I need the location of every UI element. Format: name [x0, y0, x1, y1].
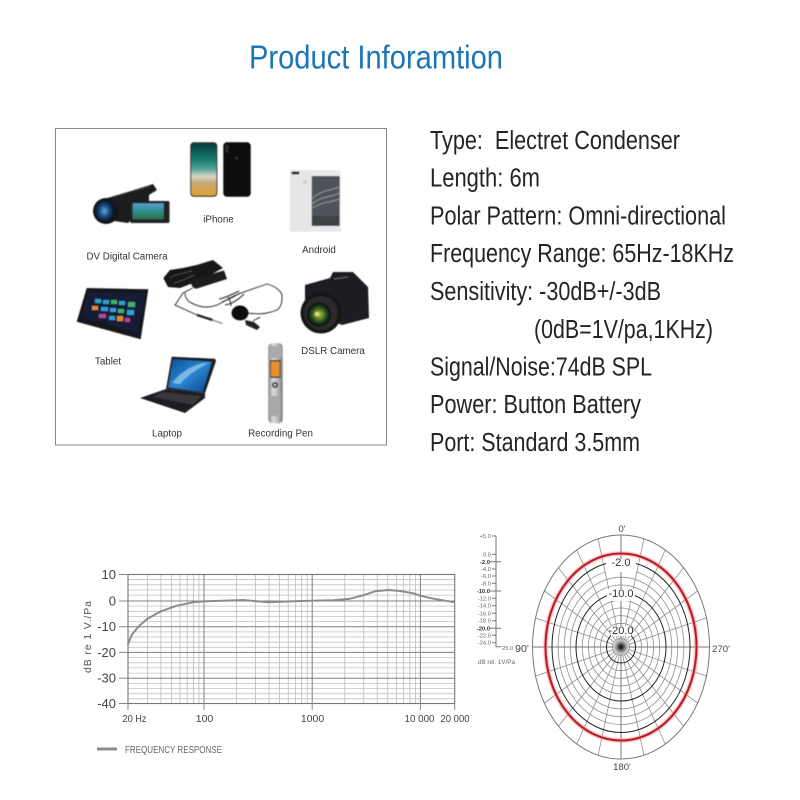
label: Recording Pen: Recording Pen: [248, 428, 313, 440]
text block: specifications: Port: Standard 3.5mm: [430, 429, 640, 457]
angle labels: 270': [712, 644, 730, 655]
label: DSLR Camera: DSLR Camera: [301, 346, 365, 357]
scale: -4.0: [481, 567, 491, 573]
icon: Android phone: [290, 170, 341, 232]
scale: +5.0: [480, 534, 491, 540]
rings: [558, 570, 684, 724]
icon: iPhone pair: [190, 142, 251, 197]
ring labels: -10.0: [608, 588, 634, 600]
ring labels: -2.0: [612, 557, 630, 569]
scale: -24.0: [478, 641, 491, 647]
response curve: [128, 590, 455, 645]
x axis labels: 1000: [301, 713, 324, 725]
icon: DV camcorder: [93, 184, 170, 224]
text block: specifications: Type: Electret Condenser: [430, 127, 680, 155]
ring labels: [606, 557, 636, 637]
legend: [97, 745, 222, 756]
scale: -10.0: [477, 589, 490, 595]
angle labels: 0': [618, 524, 626, 535]
scale: -16.0: [478, 611, 491, 617]
icon: lavalier microphone: [163, 260, 282, 330]
label: Android: Android: [302, 245, 336, 256]
scale: dB rel. 1V/Pa: [478, 659, 515, 666]
chart: frequency response: [82, 567, 470, 756]
x axis labels: 100: [196, 713, 213, 725]
text block: specifications: Polar Pattern: Omni-directional: [430, 202, 726, 230]
scale: [477, 534, 515, 666]
y axis labels: 10: [102, 567, 116, 582]
angle labels: [515, 524, 730, 773]
x axis labels: 10 000: [404, 713, 435, 725]
scale: 25.0: [502, 646, 513, 652]
hub: [613, 639, 629, 655]
spokes: [536, 539, 706, 755]
angle labels: 90': [515, 643, 529, 655]
scale: -20.0: [477, 626, 490, 632]
icon: tablet: [77, 288, 148, 339]
scale: -22.0: [478, 633, 491, 639]
label: Laptop: Laptop: [152, 428, 183, 440]
y axis labels: -20: [97, 645, 116, 660]
scale: -8.0: [481, 581, 491, 587]
label: iPhone: iPhone: [203, 214, 234, 226]
text block: specifications: (0dB=1V/pa,1KHz): [534, 316, 713, 344]
scale: -2.0: [480, 560, 490, 566]
polar plot: [532, 535, 710, 759]
grid: [128, 580, 455, 699]
black level rings: [552, 562, 690, 732]
text block: specifications: Signal/Noise:74dB SPL: [430, 354, 652, 382]
scale: -6.0: [481, 574, 491, 580]
y axis labels: -10: [97, 619, 116, 634]
text block: specifications: Length: 6m: [430, 165, 540, 193]
panel: compatible devices: [56, 128, 386, 445]
y axis labels: [97, 567, 116, 711]
label: DV Digital Camera: DV Digital Camera: [86, 252, 168, 262]
y axis title: dB re 1 V./Pa: [82, 601, 94, 673]
outer ring: [532, 535, 710, 759]
text block: specifications: Sensitivity: -30dB+/-3dB: [430, 278, 661, 306]
y axis labels: 0: [109, 594, 116, 608]
title: Product Inforamtion: [249, 38, 503, 76]
y axis labels: -30: [97, 670, 116, 686]
scale: -18.0: [478, 619, 491, 625]
x axis labels: 20 000: [440, 713, 470, 725]
legend: FREQUENCY RESPONSE: [125, 745, 222, 756]
y axis labels: -40: [97, 696, 116, 711]
scale: -14.0: [478, 604, 491, 610]
angle labels: 180': [613, 762, 631, 773]
axis ticks: [119, 574, 455, 710]
label: Tablet: Tablet: [95, 356, 121, 368]
x axis labels: 20 Hz: [122, 713, 146, 725]
red response ring: [546, 554, 696, 740]
x axis labels: [122, 713, 470, 725]
text block: specifications: Power: Button Battery: [430, 391, 641, 419]
icon: DSLR camera: [300, 272, 369, 334]
scale: 0.0: [483, 552, 491, 558]
chart: polar pattern: [477, 524, 730, 773]
scale: -12.0: [478, 596, 491, 602]
ring labels: -20.0: [608, 625, 634, 637]
text block: specifications: Frequency Range: 65Hz-18KHz: [430, 240, 734, 268]
icon: recording pen: [268, 343, 283, 423]
text block: specifications: [430, 127, 734, 457]
icon: laptop: [140, 357, 216, 413]
